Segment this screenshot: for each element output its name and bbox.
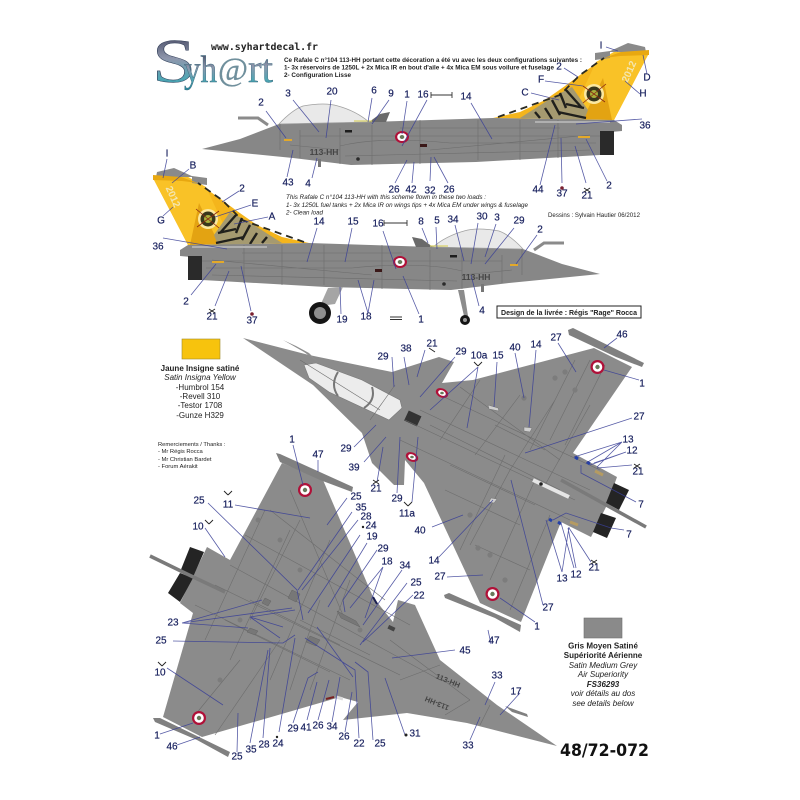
- callout numbers: side views: B: [190, 160, 197, 172]
- English description: [285, 193, 528, 216]
- grey paint references: Satin Medium Grey: [569, 661, 638, 670]
- callout numbers: plan views: 35: [245, 744, 257, 756]
- callout numbers: plan views: 10: [192, 522, 204, 532]
- registration: 113-HH: [310, 147, 338, 157]
- French description: Ce Rafale C n°104 113-HH portant cette décoration a été vu avec les deux configurations suivantes :: [284, 56, 582, 64]
- product reference: 48/72-072: [560, 741, 649, 760]
- callout numbers: side views: 1: [404, 90, 410, 100]
- callout numbers: plan views: 7: [638, 500, 644, 510]
- callout numbers: side views: 32: [424, 186, 436, 196]
- English description: 1- 3x 1250L fuel tanks + 2x Mica IR on wings tips + 4x Mica EM under wings & fuselage: [286, 202, 528, 209]
- callout numbers: plan views: 29: [377, 352, 389, 362]
- callout numbers: plan views: 7: [626, 530, 632, 540]
- callout numbers: side views: 4: [479, 306, 485, 316]
- thanks: [158, 442, 226, 470]
- plan view: lower surface: [150, 453, 557, 757]
- callout numbers: plan views: 1: [154, 730, 160, 742]
- callout numbers: side views: 4: [305, 178, 311, 190]
- callout numbers: plan views: 12: [570, 570, 582, 580]
- roundels: [192, 483, 312, 725]
- callout numbers: plan views: 21: [632, 466, 644, 478]
- callout numbers: side views: 37: [556, 188, 568, 200]
- canopy: [304, 363, 402, 420]
- callout numbers: plan views: 13: [556, 574, 568, 584]
- callout numbers: plan views: 15: [492, 350, 504, 362]
- grey paint references: voir détails au dos: [571, 689, 635, 698]
- callout numbers: side views: 16: [372, 218, 384, 230]
- callout numbers: side views: 36: [152, 242, 164, 252]
- callout numbers: plan views: 46: [616, 330, 628, 340]
- callout numbers: plan views: 28: [258, 740, 270, 750]
- thanks: - Mr Régis Rocca: [158, 449, 204, 455]
- callout numbers: side views: 8: [418, 216, 424, 228]
- callout numbers: plan views: 29: [340, 444, 352, 454]
- logo: Syh@rt: S: [152, 28, 196, 96]
- callout numbers: side views: 42: [405, 184, 417, 196]
- thanks: - Mr Christian Bardet: [158, 457, 212, 463]
- callout numbers: side views: D: [643, 72, 651, 84]
- callout numbers: plan views: 25: [155, 636, 167, 646]
- logo: Syh@rt: yh: [184, 49, 217, 91]
- grey paint references: [564, 642, 643, 708]
- callout numbers: plan views: 22: [413, 590, 425, 602]
- leader lines: plan views: [160, 338, 639, 752]
- callout numbers: plan views: 46: [166, 742, 178, 752]
- thanks: - Forum Aérakit: [158, 464, 198, 470]
- callout numbers: side views: I: [166, 148, 168, 160]
- callout numbers: plan views: 25: [410, 578, 422, 588]
- callout numbers: side views: E: [252, 198, 259, 210]
- callout numbers: side views: 15: [347, 216, 359, 228]
- grey paint references: Air Superiority: [577, 670, 629, 679]
- wing tip rails: [444, 328, 644, 632]
- callout numbers: plan views: 25: [231, 752, 243, 762]
- grey colour swatch: [584, 618, 622, 638]
- callout numbers: plan views: 27: [633, 412, 645, 422]
- plan view: upper surface: [243, 328, 646, 632]
- callout numbers: side views: 37: [246, 316, 258, 326]
- registration: 113-HH: [462, 272, 490, 282]
- callout numbers: side views: 5: [434, 216, 440, 226]
- callout numbers: plan views: 33: [491, 670, 503, 682]
- callout numbers: plan views: 26: [312, 720, 324, 732]
- callout numbers: plan views: 29: [377, 544, 389, 554]
- drawing credit: Dessins : Sylvain Hautier 06/2012: [548, 212, 640, 219]
- exhaust nozzles: [593, 483, 629, 538]
- callout numbers: plan views: 10a: [471, 350, 488, 362]
- callout numbers: plan views: 25: [193, 496, 205, 506]
- callout numbers: plan views: 27: [550, 332, 562, 344]
- callout numbers: plan views: 27: [434, 572, 446, 582]
- callout numbers: plan views: 34: [326, 722, 338, 732]
- callout numbers: side views: 43: [282, 178, 294, 188]
- callout numbers: side views: 1: [418, 314, 424, 326]
- callout numbers: side views: 19: [336, 314, 348, 326]
- grey paint references: Gris Moyen Satiné: [568, 642, 638, 650]
- callout numbers: side views: 20: [326, 86, 338, 98]
- callout numbers: plan views: 24: [365, 520, 377, 532]
- callout numbers: side views: 6: [371, 86, 377, 96]
- English description: 2- Clean load: [285, 210, 323, 216]
- callout numbers: side views: [152, 40, 651, 326]
- yellow paint references: Satin Insigna Yellow: [164, 373, 237, 382]
- livery designer box: Design de la livrée : Régis "Rage" Rocca: [501, 308, 638, 317]
- callout numbers: plan views: 21: [370, 484, 382, 494]
- callout numbers: side views: F: [538, 74, 544, 86]
- callout numbers: plan views: 27: [542, 602, 554, 614]
- callout numbers: plan views: 25: [350, 492, 362, 502]
- grey paint references: Supériorité Aérienne: [564, 651, 643, 660]
- callout numbers: plan views: 47: [488, 636, 500, 646]
- tail year: 2012: [620, 59, 639, 84]
- callout numbers: plan views: 25: [374, 738, 386, 750]
- callout numbers: plan views: 28: [360, 512, 372, 522]
- callout numbers: plan views: 33: [462, 740, 474, 752]
- callout numbers: plan views: [154, 330, 645, 762]
- callout numbers: side views: 26: [388, 184, 400, 196]
- plan view: lower surface: 113-HH: [424, 694, 450, 712]
- callout numbers: side views: 14: [460, 92, 472, 102]
- yellow paint references: -Testor 1708: [178, 401, 223, 410]
- callout numbers: plan views: 17: [510, 686, 522, 698]
- exhaust nozzles: [168, 547, 204, 602]
- callout numbers: side views: 16: [417, 90, 429, 100]
- callout numbers: plan views: 29: [287, 724, 299, 734]
- thanks: Remerciements / Thanks :: [158, 442, 226, 448]
- callout numbers: plan views: 19: [366, 532, 378, 542]
- callout numbers: plan views: 29: [455, 346, 467, 358]
- callout numbers: plan views: 22: [353, 738, 365, 750]
- lower side-view jet: [153, 168, 600, 325]
- callout numbers: plan views: 18: [381, 556, 393, 568]
- wing tip rails: [153, 453, 528, 757]
- callout numbers: side views: 2: [606, 180, 612, 192]
- callout numbers: plan views: 21: [588, 562, 600, 574]
- callout numbers: side views: 2: [239, 184, 245, 194]
- callout numbers: plan views: 11: [223, 500, 234, 510]
- callout numbers: side views: 18: [360, 312, 372, 322]
- callout numbers: plan views: 1: [534, 622, 540, 632]
- callout numbers: plan views: 26: [338, 732, 350, 742]
- logo: Syh@rt: [152, 28, 273, 96]
- callout numbers: plan views: 12: [626, 446, 638, 456]
- logo: Syh@rt: rt: [248, 46, 273, 91]
- callout numbers: side views: 2: [537, 224, 543, 236]
- tail year: 2012: [163, 185, 182, 210]
- registrations: 113-HH: [435, 672, 461, 690]
- callout numbers: side views: 34: [447, 214, 459, 226]
- callout numbers: plan views: 40: [509, 342, 521, 354]
- nose landing gear: [458, 290, 470, 325]
- callout numbers: plan views: 24: [272, 738, 284, 750]
- grey paint references: see details below: [572, 699, 635, 708]
- panel lines: [195, 490, 490, 735]
- leader lines: side views: [163, 47, 647, 314]
- callout numbers: side views: I: [600, 40, 602, 52]
- callout numbers: side views: 29: [513, 216, 525, 226]
- callout numbers: plan views: 40: [414, 526, 426, 536]
- callout numbers: plan views: 14: [428, 556, 440, 566]
- callout numbers: plan views: 45: [459, 646, 471, 656]
- callout numbers: side views: 21: [206, 312, 218, 322]
- callout numbers: plan views: 13: [622, 434, 634, 446]
- callout numbers: side views: 3: [494, 212, 500, 224]
- French description: [284, 56, 582, 79]
- callout numbers: side views: G: [157, 216, 165, 226]
- callout numbers: plan views: 39: [348, 462, 360, 474]
- callout numbers: plan views: 38: [400, 344, 412, 354]
- callout numbers: side views: 36: [639, 120, 651, 132]
- callout numbers: side views: A: [269, 212, 276, 222]
- callout numbers: plan views: 41: [300, 722, 312, 734]
- yellow paint references: -Gunze H329: [176, 411, 224, 420]
- callout numbers: side views: 2: [258, 98, 264, 108]
- callout numbers: side views: 44: [532, 184, 544, 196]
- callout numbers: plan views: 21: [426, 338, 438, 350]
- callout numbers: side views: C: [521, 88, 529, 98]
- callout numbers: plan views: 47: [312, 450, 324, 460]
- yellow paint references: [161, 364, 240, 420]
- callout numbers: side views: 2: [556, 62, 562, 72]
- callout numbers: plan views: 11a: [399, 508, 415, 520]
- callout numbers: side views: 30: [476, 212, 488, 222]
- callout numbers: plan views: 10: [154, 668, 166, 678]
- callout numbers: side views: 21: [581, 190, 593, 202]
- yellow paint references: -Humbrol 154: [176, 383, 225, 392]
- callout numbers: plan views: 34: [399, 560, 411, 572]
- yellow paint references: Jaune Insigne satiné: [161, 364, 240, 373]
- callout numbers: side views: H: [639, 88, 647, 100]
- callout numbers: plan views: 1: [289, 434, 295, 446]
- logo: Syh@rt: @: [218, 52, 248, 88]
- callout numbers: plan views: 35: [355, 502, 367, 514]
- callout numbers: side views: 26: [443, 184, 455, 196]
- panel lines: [300, 360, 605, 610]
- English description: This Rafale C n°104 113-HH with this scheme flown in these two loads :: [286, 193, 486, 201]
- main landing gear: [309, 287, 343, 324]
- French description: 2- Configuration Lisse: [284, 72, 351, 79]
- yellow paint references: -Revell 310: [180, 392, 221, 401]
- website url: www.syhartdecal.fr: [211, 42, 318, 53]
- small marking symbols: [158, 92, 640, 738]
- grey paint references: FS36293: [587, 680, 620, 689]
- callout numbers: side views: 14: [313, 216, 325, 228]
- callout numbers: side views: 2: [183, 296, 189, 308]
- callout numbers: plan views: 31: [409, 728, 421, 740]
- callout numbers: side views: 3: [285, 88, 291, 100]
- callout numbers: side views: 9: [388, 88, 394, 100]
- callout numbers: plan views: 23: [167, 618, 179, 628]
- callout numbers: plan views: 1: [639, 378, 645, 390]
- French description: 1- 3x réservoirs de 1250L + 2x Mica IR en bout d'aile + 4x Mica EM sous voilure et fuselage: [284, 64, 554, 72]
- callout numbers: plan views: 29: [391, 494, 403, 504]
- yellow colour swatch: [182, 339, 220, 359]
- callout numbers: plan views: 14: [530, 340, 542, 350]
- roundels: [404, 360, 604, 601]
- top side-view jet: [202, 43, 649, 167]
